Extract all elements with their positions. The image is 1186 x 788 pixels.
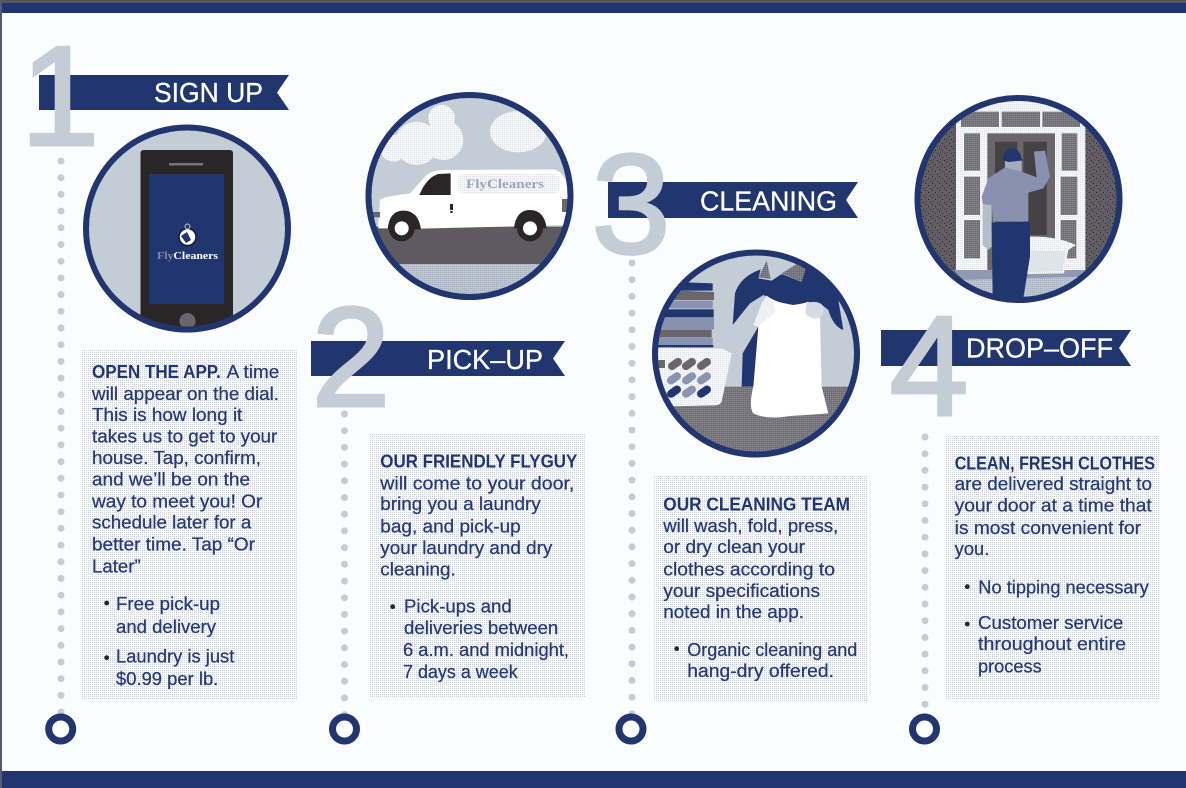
text panel 2: Pick-ups and <box>404 597 512 617</box>
text panel 1: Later” <box>92 556 141 576</box>
shirt and lower body <box>733 266 843 387</box>
illustration: phone with app: FlyCleaners <box>157 250 219 262</box>
text panel 2: OUR FRIENDLY FLYGUY <box>380 451 577 471</box>
text panel 4: Customer service <box>978 613 1123 633</box>
illustration: delivery van <box>360 95 587 304</box>
text panel 1: takes us to get to your <box>92 426 277 446</box>
text panel 3: OUR CLEANING TEAM <box>663 494 850 514</box>
banner: sign up <box>39 75 289 110</box>
laundry basket <box>1027 237 1076 274</box>
illustration: courier at the door <box>918 97 1120 307</box>
text panel 4: throughout entire <box>978 634 1126 654</box>
illustration: laundry and clean clothes <box>647 252 860 460</box>
text panel 1: OPEN THE APP. <box>92 362 221 382</box>
text panel 4: your door at a time that <box>955 496 1152 516</box>
text panel 2: will come to your door, <box>379 473 574 493</box>
courier <box>982 149 1050 298</box>
text panel 4: are delivered straight to <box>955 474 1152 494</box>
text panel 1: better time. Tap “Or <box>92 534 255 554</box>
text panel 3: or dry clean your <box>663 537 805 557</box>
text panel 1: schedule later for a <box>92 512 252 532</box>
text panel 1: Free pick-up <box>116 594 220 614</box>
text panel 3: your specifications <box>663 581 820 601</box>
step 4: drop-off <box>881 97 1160 741</box>
text panel 1 <box>82 349 298 700</box>
text panel 2 <box>370 433 585 698</box>
text panel 1: A time <box>227 362 279 382</box>
garment bag <box>751 296 828 417</box>
text panel 3: will wash, fold, press, <box>662 516 838 536</box>
text panel 4: CLEAN, FRESH CLOTHES <box>955 453 1155 473</box>
timeline 4 <box>912 437 936 741</box>
banner: pick-up <box>311 341 565 376</box>
text panel 1: $0.99 per lb. <box>116 669 218 689</box>
text panel 4: process <box>978 657 1042 677</box>
folded stack <box>653 282 714 347</box>
text panel 1: house. Tap, confirm, <box>92 448 261 468</box>
timeline 2 <box>332 414 356 741</box>
timeline 3 <box>619 263 643 741</box>
text panel 3: clothes according to <box>663 559 835 579</box>
text panel 3: hang-dry offered. <box>687 661 834 681</box>
text panel 2: 6 a.m. and midnight, <box>403 640 569 660</box>
number 4: 4 <box>890 287 968 446</box>
step 2: pick-up <box>311 95 587 741</box>
text panel 1: way to meet you! Or <box>91 492 262 512</box>
banner: drop-off <box>881 330 1131 366</box>
bottom band <box>2 771 1186 788</box>
banner: pick-up: PICK–UP <box>427 344 543 375</box>
text panel 4: is most convenient for <box>955 518 1141 538</box>
collar <box>759 261 806 282</box>
number 2: 2 <box>312 278 390 437</box>
text panel 4 <box>945 435 1160 699</box>
text panel 2: deliveries between <box>404 618 558 638</box>
illustration: phone with app <box>86 128 288 340</box>
banner: cleaning: CLEANING <box>700 186 837 217</box>
banner: drop-off: DROP–OFF <box>966 333 1113 364</box>
text panel 4: you. <box>955 539 989 559</box>
text panel 3 <box>653 476 868 702</box>
number 3: 3 <box>592 125 670 284</box>
step 1: sign up <box>21 17 298 741</box>
basket <box>658 348 732 406</box>
text panel 2: 7 days a week <box>403 662 519 682</box>
number 1: 1 <box>21 17 99 176</box>
illustration: delivery van: FlyCleaners <box>466 177 544 191</box>
banner: cleaning <box>608 182 858 218</box>
text panel 1: This is how long it <box>92 405 242 425</box>
text panel 3: noted in the app. <box>663 602 804 622</box>
text panel 2: bring you a laundry <box>380 494 541 514</box>
text panel 2: your laundry and dry <box>380 538 552 558</box>
floor <box>954 270 1086 297</box>
timeline 1 <box>49 161 73 741</box>
text panel 1: and delivery <box>116 617 216 637</box>
text panel 1: will appear on the dial. <box>91 384 279 404</box>
text panel 1: and we’ll be on the <box>92 470 250 490</box>
step 3: cleaning <box>592 125 868 741</box>
text panel 4: No tipping necessary <box>978 577 1149 597</box>
text panel 2: cleaning. <box>380 559 456 579</box>
text panel 1: Laundry is just <box>116 646 234 666</box>
banner: sign up: SIGN UP <box>154 77 263 108</box>
text panel 3: Organic cleaning and <box>687 640 857 660</box>
top band <box>2 3 1186 13</box>
text panel 2: bag, and pick-up <box>380 517 521 537</box>
